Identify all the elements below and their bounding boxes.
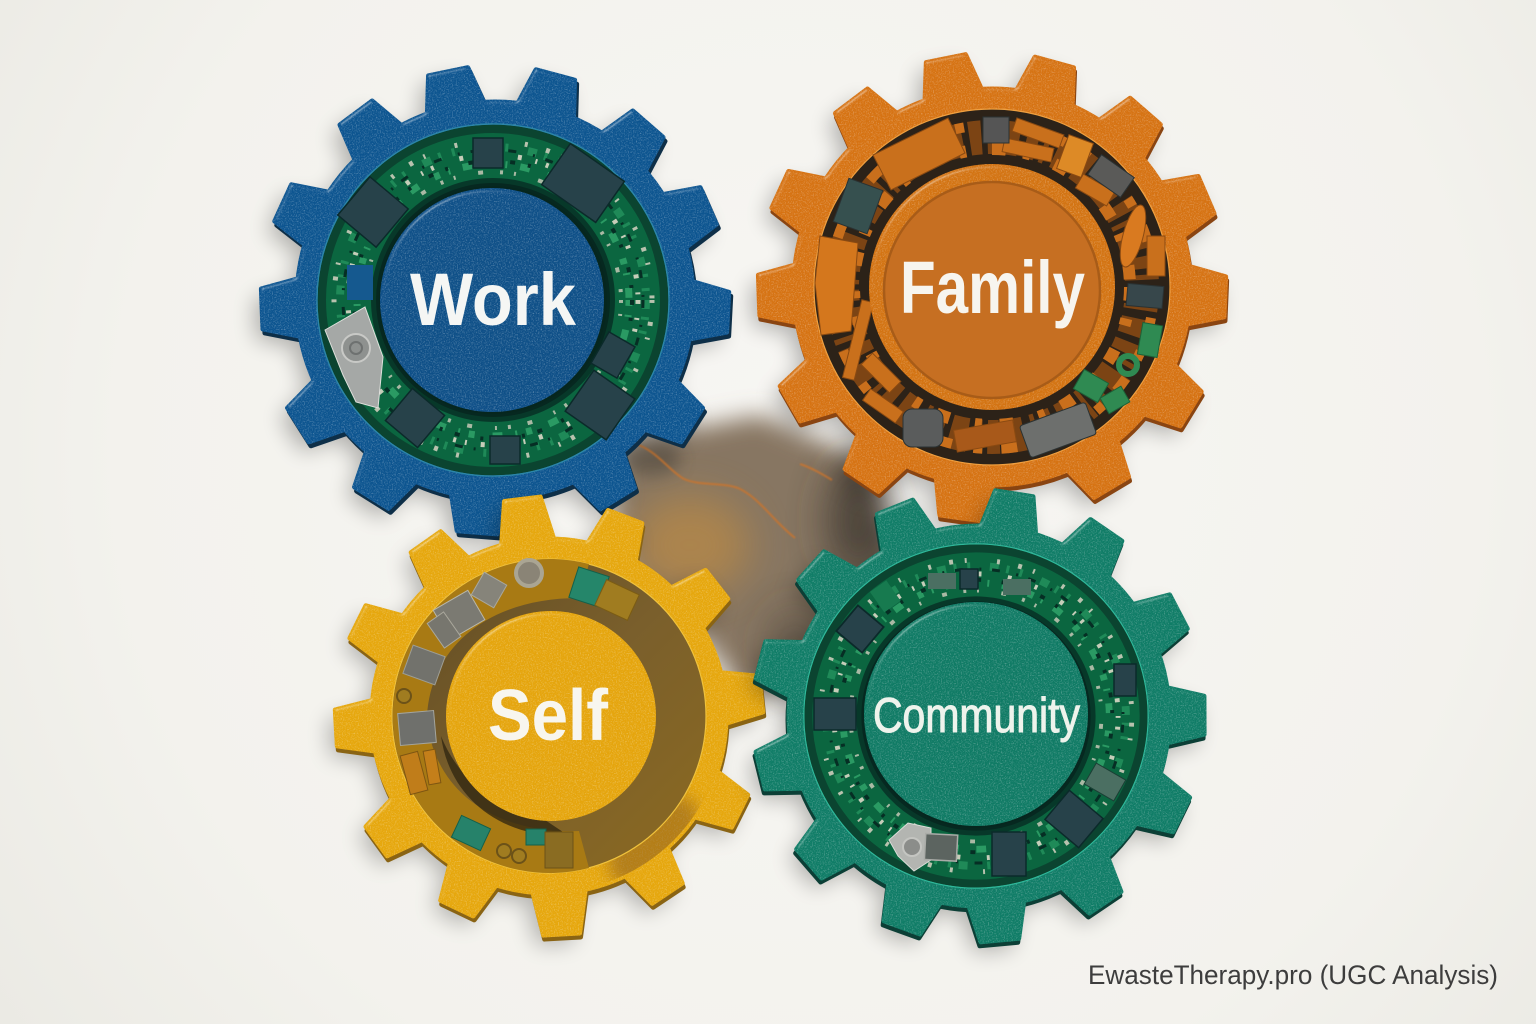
silver bracket [889, 823, 958, 871]
Self hub [446, 611, 656, 821]
gear: Work [254, 66, 731, 545]
Family label: Family [900, 246, 1085, 329]
Family gear body [751, 53, 1227, 532]
Self gear body [328, 496, 765, 945]
Self label: Self [488, 676, 609, 756]
burn mark between gears [615, 415, 895, 695]
Community label: Community [873, 689, 1080, 743]
Community circuit board ring [767, 507, 1185, 925]
Self e-waste ring with rust [392, 559, 706, 873]
source credit: EwasteTherapy.pro (UGC Analysis) [1088, 960, 1498, 990]
Family e-waste ring [814, 109, 1170, 465]
Work gear body [254, 66, 731, 545]
gear: Community [747, 489, 1204, 953]
silver bracket [325, 307, 383, 408]
gear: Self [328, 496, 765, 945]
Community hub [864, 602, 1088, 826]
Family hub ring [869, 164, 1115, 410]
gear: Family [751, 53, 1227, 532]
Family hub recess [884, 182, 1100, 398]
Work label: Work [410, 258, 577, 341]
Work hub [380, 188, 604, 412]
Community gear body [747, 489, 1204, 953]
Work circuit board ring [317, 124, 669, 476]
